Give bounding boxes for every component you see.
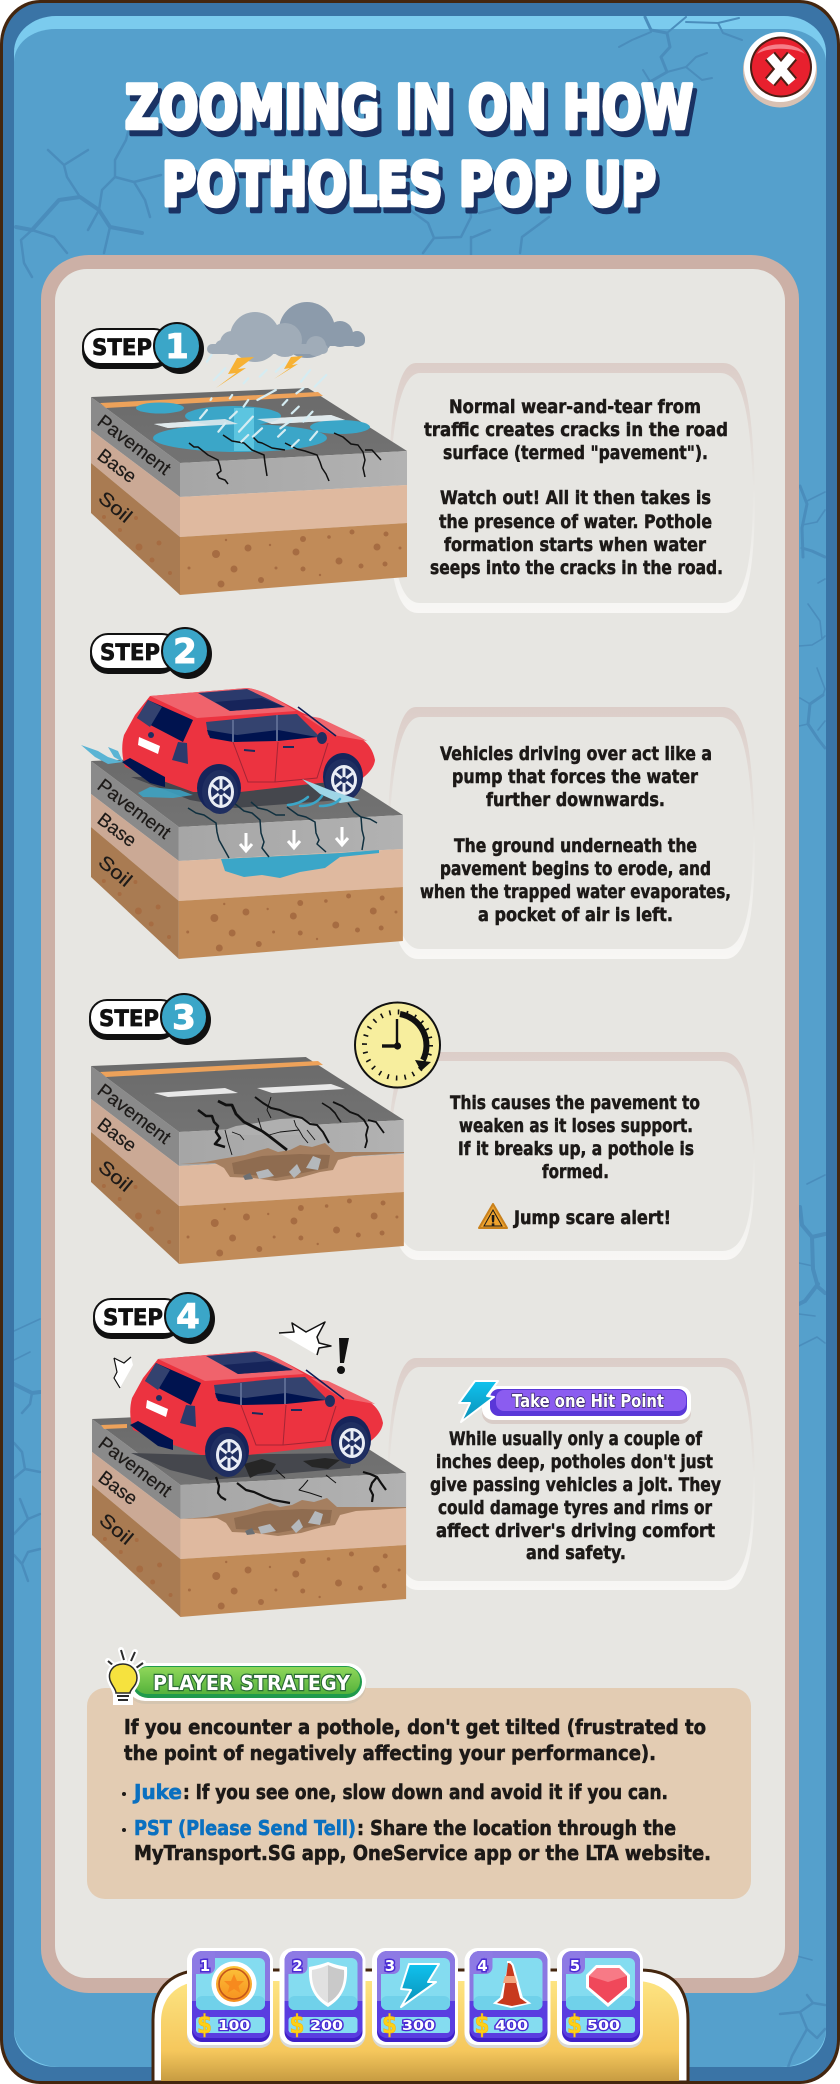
hit point tag [459, 1381, 691, 1424]
close button [743, 32, 817, 108]
step 1 description: traffic creates cracks in the road [424, 419, 728, 441]
title: POTHOLES POP UP [166, 156, 660, 226]
strategy text: MyTransport.SG app, OneService app or the LTA website. [134, 1841, 711, 1865]
step 1 description: seeps into the cracks in the road. [430, 557, 723, 579]
pothole holes [244, 1458, 340, 1478]
step 2 description: further downwards. [486, 789, 665, 811]
step 1 description: the presence of water. Pothole [439, 511, 712, 533]
layer labels: Pavement [94, 1433, 176, 1502]
step 4 description: inches deep, potholes don't just [436, 1451, 713, 1473]
text bubble: step 1 [388, 363, 755, 613]
power-up card 4: traffic cone: 400 [495, 2019, 528, 2034]
step 4 badge [93, 1293, 215, 1344]
step 2 description: when the trapped water evaporates, [420, 881, 731, 903]
step 2 road cross-section [91, 752, 403, 959]
power-up card 3: lightning bolt [372, 1948, 458, 2048]
power-up card 1: coin: 100 [218, 2019, 250, 2034]
text bubble: step 2 [387, 707, 755, 959]
step 2 description: The ground underneath the [454, 835, 697, 857]
layer labels: Soil [95, 1510, 137, 1550]
step 2 badge [90, 628, 212, 679]
layer labels: Soil [94, 488, 136, 528]
power-up card 3: lightning bolt: 3 [385, 1957, 395, 1975]
trapped water under the pavement [221, 850, 379, 878]
step 3 description: If it breaks up, a pothole is [458, 1138, 694, 1160]
icon: storm clouds with rain and lightning [200, 302, 365, 447]
road marking [101, 1424, 127, 1429]
step 3 badge [89, 994, 211, 1045]
step 2 description: pavement begins to erode, and [440, 858, 711, 880]
puddles [136, 402, 370, 452]
layer labels: Base [93, 809, 140, 852]
power-up card 2: shield: $ [290, 2010, 304, 2040]
cracks [188, 802, 377, 858]
layer labels [93, 775, 175, 892]
icon: car splashing through water [81, 688, 375, 814]
step 1 badge: STEP [92, 336, 152, 361]
step 1 badge [82, 323, 204, 374]
power-up card 4: traffic cone: 4 [477, 1957, 488, 1975]
strategy text: If you encounter a pothole, don't get tilted (frustrated to [124, 1715, 706, 1739]
layer labels [93, 411, 175, 528]
power-up card 5: gem: 500 [587, 2019, 620, 2034]
step 3 description: formed. [542, 1161, 609, 1183]
step 1 description [424, 396, 728, 579]
step 3 description: This causes the pavement to [450, 1092, 700, 1114]
road markings [100, 1061, 345, 1097]
road shadow [131, 775, 360, 808]
step 3 road cross-section [91, 1057, 404, 1264]
power-up card 1: coin [187, 1948, 273, 2048]
strategy text: : Share the location through the [357, 1816, 676, 1840]
step 4 description: give passing vehicles a jolt. They [430, 1474, 721, 1496]
layer labels: Base [94, 1467, 141, 1510]
icon: warning triangle [479, 1204, 507, 1230]
step 4 description: While usually only a couple of [449, 1428, 703, 1450]
step 3 description: Jump scare alert! [512, 1207, 671, 1229]
layer labels: Base [93, 445, 140, 488]
title: ZOOMING IN ON HOW [125, 73, 693, 143]
step 4 description [430, 1428, 721, 1564]
step 1 badge: 1 [165, 327, 189, 367]
layer labels: Pavement [93, 1080, 175, 1149]
power-up card 4: traffic cone: $ [474, 2010, 490, 2040]
power-up card 3: lightning bolt: 300 [402, 2019, 435, 2034]
strategy text: Juke [132, 1780, 182, 1804]
step 2 badge: 2 [173, 632, 197, 672]
layer labels: Base [93, 1114, 140, 1157]
title [125, 73, 697, 226]
cracks [189, 433, 381, 484]
layer labels: Pavement [93, 411, 175, 480]
strategy text [122, 1715, 711, 1865]
step 1 description: Watch out! All it then takes is [440, 487, 711, 509]
cracks [216, 1470, 386, 1503]
panel: player strategy [87, 1650, 751, 1899]
layer labels [94, 1433, 176, 1550]
step 1 road cross-section [91, 388, 407, 595]
icon: warning triangle: ! [490, 1212, 496, 1230]
step 2 description: pump that forces the water [452, 766, 699, 788]
power-up card 3: lightning bolt: $ [382, 2010, 397, 2040]
arrows pushing down [240, 827, 348, 851]
text bubble: step 3 [387, 1052, 755, 1260]
step 4 badge: 4 [176, 1297, 200, 1337]
power-up card 2: shield: 200 [310, 2019, 343, 2034]
crumbled road edge [222, 1118, 330, 1135]
step 1 description: formation starts when water [444, 534, 707, 556]
icon: clock [355, 1002, 440, 1088]
step 2 badge: STEP [100, 641, 160, 666]
step 4 description: and safety. [526, 1542, 626, 1564]
title: ZOOMING IN ON HOW [129, 79, 697, 149]
yellow tray [153, 1970, 688, 2082]
step 1 description: Normal wear-and-tear from [449, 396, 701, 418]
pothole cavity [180, 1143, 404, 1181]
strategy text: PST (Please Send Tell) [134, 1816, 356, 1840]
power-up card 4: traffic cone [464, 1948, 550, 2048]
step 3 description [450, 1092, 700, 1229]
layer labels [93, 1080, 175, 1197]
power-up card 1: coin: 1 [200, 1957, 210, 1975]
icon: light bulb [108, 1650, 143, 1702]
hit point tag: Take one Hit Point [512, 1391, 664, 1412]
layer labels: Soil [94, 852, 136, 892]
step 3 badge: STEP [99, 1007, 159, 1032]
power-up card 1: coin: $ [197, 2010, 212, 2040]
power-up card 5: gem [557, 1948, 643, 2048]
player strategy tag [126, 1663, 366, 1704]
step 4 description: could damage tyres and rims or [438, 1497, 713, 1519]
step 2 description [420, 743, 731, 926]
step 2 description: Vehicles driving over act like a [440, 743, 712, 765]
layer labels: Pavement [93, 775, 175, 844]
strategy text: the point of negatively affecting your performance). [124, 1741, 656, 1765]
road markings [100, 392, 345, 428]
layer labels: Soil [94, 1157, 136, 1197]
power-up card 2: shield: 2 [292, 1957, 303, 1975]
icon: impact marks [114, 1322, 349, 1388]
cracks [198, 1097, 384, 1155]
title: POTHOLES POP UP [162, 150, 656, 220]
step 2 description: a pocket of air is left. [478, 904, 673, 926]
step 3 description: weaken as it loses support. [459, 1115, 693, 1137]
step 4 description: affect driver's driving comfort [436, 1520, 715, 1542]
icon: car jolting over pothole [130, 1351, 383, 1477]
step 4 badge: STEP [103, 1306, 163, 1331]
step 4 road cross-section [92, 1410, 406, 1617]
pothole cavity [182, 1498, 406, 1536]
player strategy tag: PLAYER STRATEGY [153, 1671, 350, 1695]
power-up card 5: gem: $ [567, 2010, 582, 2040]
power-up card 2: shield [280, 1948, 366, 2048]
step 1 description: surface (termed "pavement"). [443, 442, 708, 464]
text bubble: step 4 [387, 1358, 755, 1590]
road shadow [131, 1453, 354, 1480]
strategy text: : If you see one, slow down and avoid it if you can. [183, 1780, 668, 1804]
main content panel [41, 255, 799, 1993]
step 3 badge: 3 [172, 998, 196, 1038]
power-up card 5: gem: 5 [570, 1957, 580, 1975]
